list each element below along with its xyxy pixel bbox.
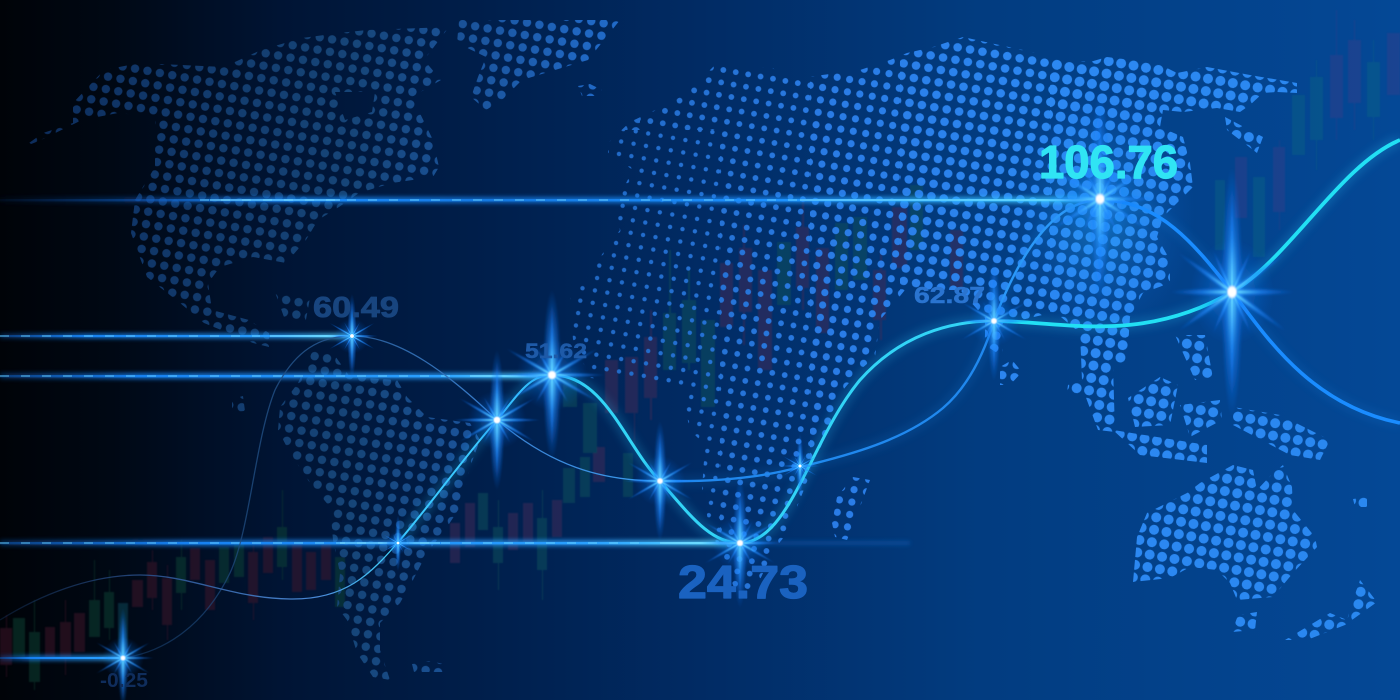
star: point -0.25: [92, 608, 154, 700]
star: crossing at lower price line: [381, 515, 415, 571]
star: lower centre crossing: [623, 421, 697, 541]
value label 24.73: 24.73: [678, 556, 808, 608]
candlestick chart: bottom left group: [0, 490, 345, 690]
value label 51.62: 51.62: [525, 340, 587, 363]
star: point 62.87: [957, 261, 1031, 381]
star: point 60.49: [326, 294, 378, 378]
value label 60.49: 60.49: [313, 292, 399, 324]
glow over Asia: [1005, 90, 1195, 340]
curve: main trend line: [0, 140, 1400, 620]
value label 62.87: 62.87: [914, 282, 985, 308]
star: main intersection: [1170, 167, 1294, 417]
candlestick chart: centre group: [450, 185, 963, 600]
star: crossing east of Africa: [780, 434, 820, 498]
star: point 51.62: [499, 290, 605, 460]
value label -0.25: -0.25: [100, 670, 148, 692]
star: crossing near South America: [454, 350, 540, 490]
curve: secondary trend line: [123, 200, 1400, 658]
star: point 24.73: [700, 478, 780, 608]
value label 106.76: 106.76: [1039, 136, 1178, 188]
candlestick chart: top right group: [1215, 10, 1400, 257]
star: point 106.76: [1041, 94, 1159, 304]
glowing horizontal price lines: [0, 197, 1100, 660]
